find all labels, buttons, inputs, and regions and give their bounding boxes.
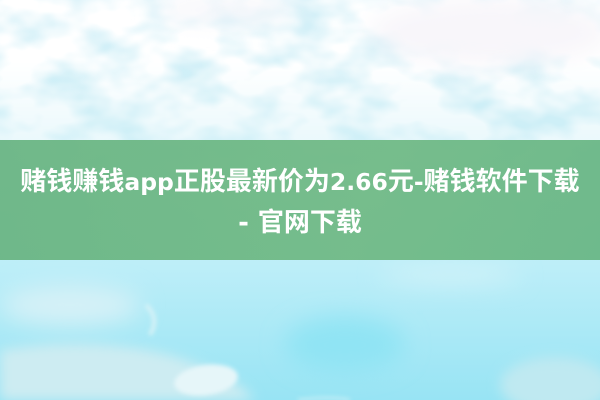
title band [0, 140, 600, 260]
title line 1: 赌钱赚钱app正股最新价为2.66元-赌钱软件下载 [20, 167, 580, 197]
title line 2: - 官网下载 [238, 208, 362, 238]
